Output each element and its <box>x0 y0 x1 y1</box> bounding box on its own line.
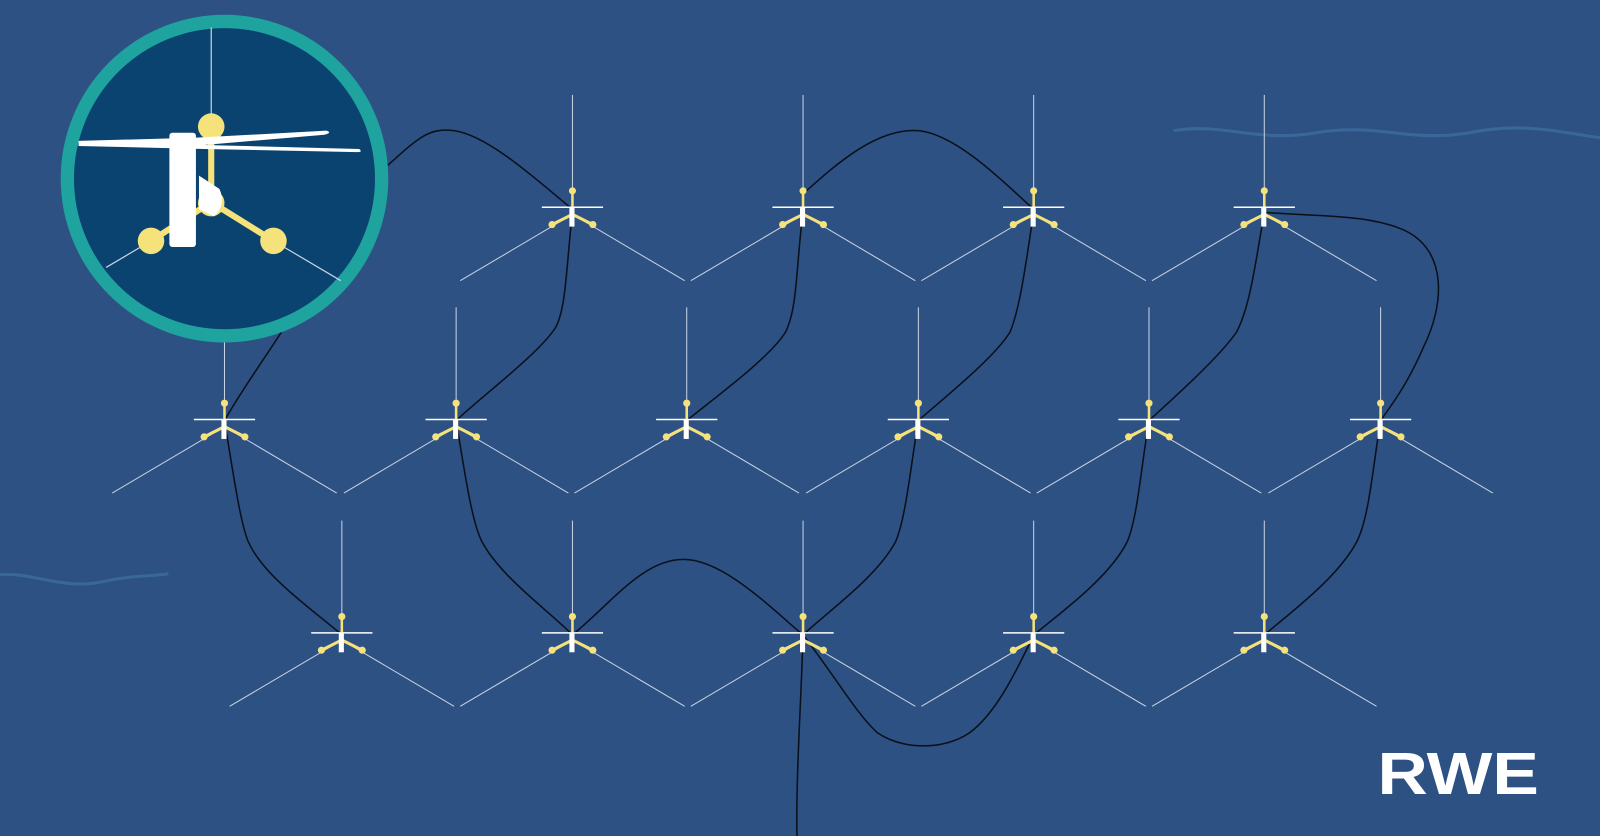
magnified turbine circle <box>67 21 382 336</box>
cables <box>224 130 1438 836</box>
logo: RWE: RWE <box>1378 740 1539 807</box>
turbines row 2 <box>112 307 1493 493</box>
waves <box>0 128 1600 584</box>
turbines row 3 <box>230 521 1377 706</box>
turbines row 1 <box>460 95 1377 281</box>
